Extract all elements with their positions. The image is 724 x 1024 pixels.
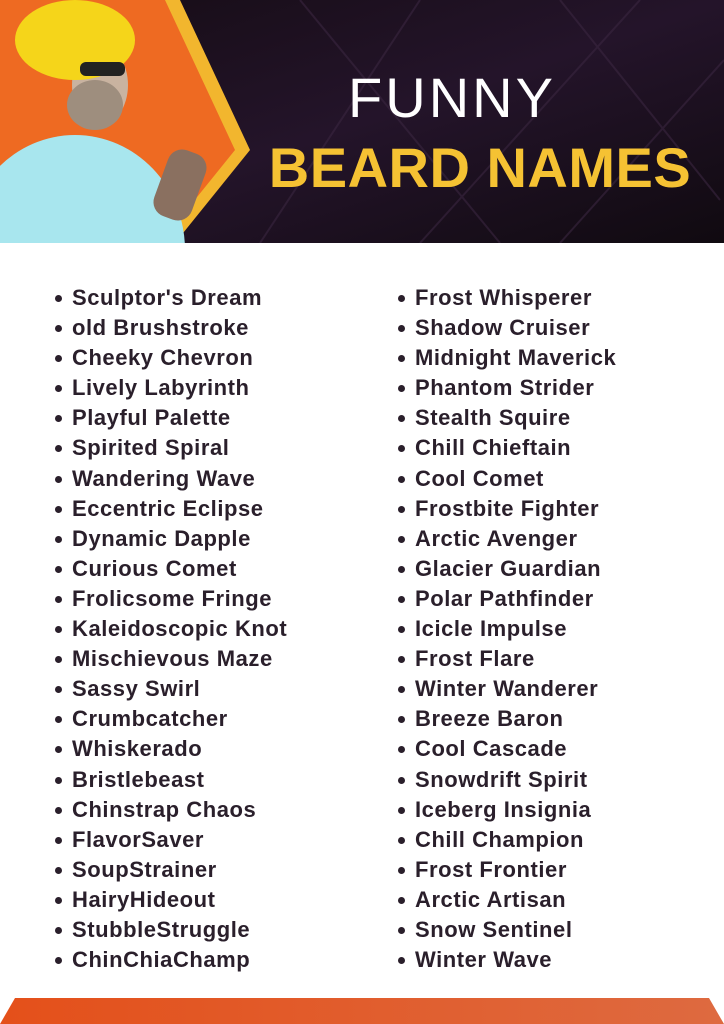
- list: right column: Snowdrift Spirit: [415, 766, 588, 792]
- list: left column: Sassy Swirl: [72, 676, 200, 701]
- list: left column: Cheeky Chevron: [72, 345, 253, 370]
- list: right column: Chill Champion: [415, 827, 584, 852]
- list: right column: Frost Flare: [415, 646, 535, 671]
- list: right column: Frost Frontier: [415, 857, 567, 882]
- list: right column: Midnight Maverick: [415, 345, 616, 370]
- list: right column: Glacier Guardian: [415, 556, 601, 581]
- list: right column: Stealth Squire: [415, 405, 571, 430]
- list: left column: StubbleStruggle: [72, 917, 250, 942]
- list: right column: [398, 285, 616, 972]
- list: left column: Kaleidoscopic Knot: [72, 616, 287, 641]
- list: right column: Frostbite Fighter: [415, 496, 599, 521]
- list: left column: Wandering Wave: [72, 466, 255, 491]
- list: left column: Frolicsome Fringe: [72, 586, 272, 611]
- list: left column: Sculptor's Dream: [72, 285, 262, 310]
- list: right column: Arctic Artisan: [415, 887, 566, 912]
- list: right column: Shadow Cruiser: [415, 315, 590, 340]
- list: right column: Winter Wanderer: [415, 676, 598, 701]
- list: left column: Curious Comet: [72, 556, 237, 581]
- list: right column: Breeze Baron: [415, 706, 563, 731]
- title: BEARD NAMES: [269, 136, 691, 199]
- list: left column: FlavorSaver: [72, 827, 204, 852]
- list: right column: Cool Comet: [415, 466, 544, 491]
- list: left column: Playful Palette: [72, 405, 231, 430]
- list: right column: Snow Sentinel: [415, 917, 572, 942]
- list: left column: Eccentric Eclipse: [72, 496, 264, 521]
- list: left column: Whiskerado: [72, 736, 202, 761]
- list: right column: Frost Whisperer: [415, 285, 592, 310]
- title: [269, 66, 691, 199]
- footer bar: [0, 998, 724, 1024]
- photo panel: [0, 0, 250, 365]
- list: left column: [55, 285, 287, 972]
- list: right column: Phantom Strider: [415, 375, 594, 400]
- list: left column: Spirited Spiral: [72, 435, 229, 460]
- list: right column: Icicle Impulse: [415, 616, 567, 641]
- list: left column: Bristlebeast: [72, 766, 205, 792]
- title: FUNNY: [348, 66, 556, 129]
- list: left column: HairyHideout: [72, 887, 216, 912]
- list: right column: Iceberg Insignia: [415, 797, 591, 822]
- list: left column: Mischievous Maze: [72, 646, 273, 671]
- list: left column: Crumbcatcher: [72, 706, 228, 731]
- list: right column: Winter Wave: [415, 947, 552, 972]
- list: right column: Chill Chieftain: [415, 435, 571, 460]
- header banner: [0, 0, 724, 243]
- list: right column: Polar Pathfinder: [415, 586, 594, 611]
- list: left column: Lively Labyrinth: [72, 375, 250, 400]
- list: left column: Chinstrap Chaos: [72, 797, 256, 822]
- list: left column: Dynamic Dapple: [72, 526, 251, 551]
- list: left column: old Brushstroke: [72, 315, 249, 340]
- list: left column: ChinChiaChamp: [72, 947, 250, 972]
- list: left column: SoupStrainer: [72, 857, 217, 882]
- list: right column: Cool Cascade: [415, 736, 567, 761]
- list: right column: Arctic Avenger: [415, 526, 578, 551]
